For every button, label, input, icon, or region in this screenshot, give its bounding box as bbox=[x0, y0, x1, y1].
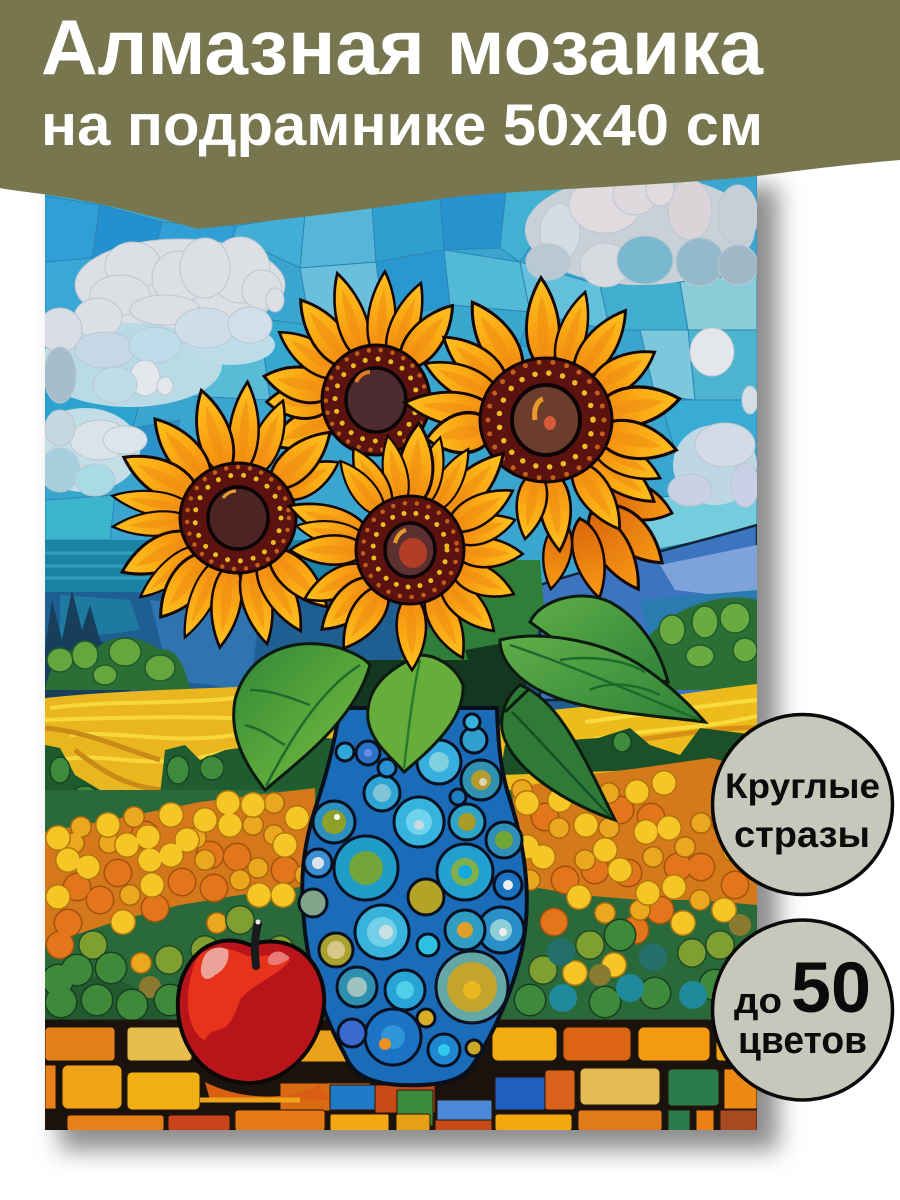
sunflower: top middle bbox=[261, 269, 465, 461]
leaf: lower right bbox=[502, 685, 615, 820]
sky mosaic bbox=[45, 170, 757, 600]
sunflower: front bbox=[284, 422, 523, 670]
title: main line: Алмазная мозаика bbox=[41, 3, 764, 91]
clouds bbox=[30, 174, 759, 507]
badge: up to 50 colours bbox=[712, 920, 892, 1100]
canvas drop shadow bbox=[60, 186, 778, 1150]
vase bbox=[299, 708, 527, 1085]
vase circles bbox=[299, 714, 524, 1066]
leaves bbox=[234, 596, 705, 820]
flower meadow bbox=[45, 758, 757, 1025]
distant hills and trees bbox=[45, 525, 757, 702]
badge: up to 50 colours: цветов bbox=[738, 1020, 867, 1062]
sunflower: right bbox=[403, 277, 683, 553]
badge: up to 50 colours: до bbox=[734, 980, 782, 1021]
leaf: upper right bbox=[530, 596, 668, 682]
leaf: centre bbox=[368, 655, 463, 772]
painting canvas bbox=[30, 170, 759, 1132]
badge: round rhinestones bbox=[712, 714, 892, 894]
leaf: long right bbox=[500, 636, 705, 722]
golden field bbox=[45, 684, 757, 790]
title: sub line: на подрамнике 50х40 см bbox=[41, 93, 763, 158]
leaf: left bbox=[234, 644, 370, 790]
vase swirl centres bbox=[312, 749, 513, 1056]
disk bbox=[356, 496, 464, 604]
disk bbox=[480, 358, 612, 482]
stems behind the flowers bbox=[345, 560, 545, 730]
badge: round rhinestones: стразы bbox=[734, 814, 870, 855]
badge: round rhinestones: Круглые bbox=[725, 767, 880, 806]
title banner bbox=[0, 0, 900, 229]
apple bbox=[178, 920, 330, 1100]
badge: up to 50 colours: 50 bbox=[791, 949, 871, 1028]
canvas base bbox=[548, 702, 584, 710]
disk bbox=[180, 463, 296, 573]
hedges below the field bbox=[45, 728, 744, 790]
disk bbox=[322, 345, 430, 455]
sunflower: left bbox=[110, 381, 346, 649]
sunflower: back hidden petals bbox=[537, 476, 677, 602]
table bricks bbox=[45, 1020, 757, 1132]
